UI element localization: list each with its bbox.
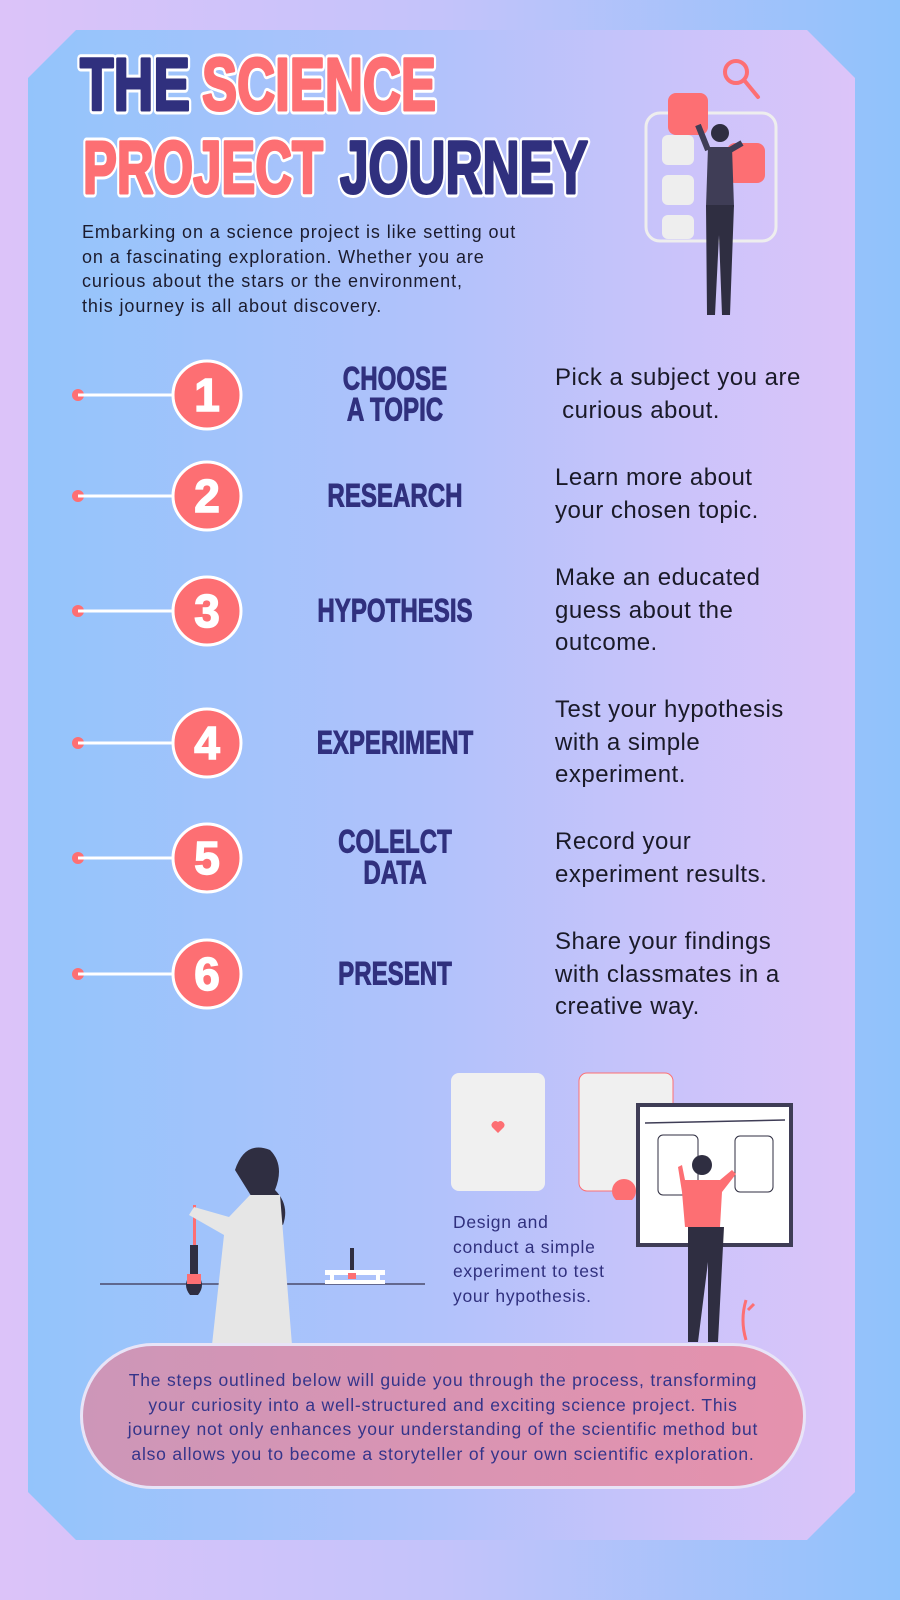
step 2: your chosen topic. bbox=[555, 496, 759, 524]
step 5 bbox=[72, 822, 767, 894]
caption: Design and bbox=[453, 1212, 549, 1232]
intro text: this journey is all about discovery. bbox=[82, 296, 382, 316]
callout: bottom summary: The steps outlined below will guide you through the process, transforming bbox=[129, 1370, 757, 1390]
step 2: RESEARCH bbox=[327, 478, 463, 513]
illustration: woman at whiteboard bbox=[636, 1103, 793, 1342]
step 4: 4 bbox=[194, 717, 220, 769]
step 6: PRESENT bbox=[338, 956, 452, 991]
step 3: outcome. bbox=[555, 629, 658, 656]
step 5: COLELCT bbox=[338, 824, 452, 859]
intro text bbox=[82, 222, 516, 316]
intro text: Embarking on a science project is like setting out bbox=[82, 222, 516, 242]
title: PROJECT bbox=[83, 126, 323, 209]
step 3 bbox=[72, 564, 760, 656]
step 1: curious about. bbox=[562, 396, 720, 424]
step 3: Make an educated bbox=[555, 564, 760, 591]
intro text: curious about the stars or the environment, bbox=[82, 271, 463, 291]
title: PROJECT bbox=[83, 126, 323, 209]
caption: experiment to test bbox=[453, 1261, 605, 1281]
step 6: Share your findings bbox=[555, 928, 771, 955]
step 5: DATA bbox=[363, 855, 427, 890]
intro text: on a fascinating exploration. Whether you are bbox=[82, 246, 485, 266]
step 5: Record your bbox=[555, 828, 691, 855]
step 6: creative way. bbox=[555, 993, 700, 1020]
illustration: scientist in lab bbox=[100, 1148, 425, 1343]
step 5: 5 bbox=[194, 832, 220, 884]
step 3: HYPOTHESIS bbox=[317, 593, 473, 628]
caption: your hypothesis. bbox=[453, 1286, 592, 1306]
step 6: with classmates in a bbox=[555, 960, 780, 988]
callout: bottom summary: journey not only enhances your understanding of the scientific method but bbox=[128, 1419, 758, 1439]
step 1 bbox=[72, 360, 801, 430]
callout: bottom summary: also allows you to become a storyteller of your own scientific exploration. bbox=[131, 1444, 755, 1464]
step 4 bbox=[72, 696, 784, 788]
step 2: Learn more about bbox=[555, 464, 752, 491]
step 2 bbox=[72, 460, 759, 532]
step 4: EXPERIMENT bbox=[317, 725, 473, 760]
step 4: experiment. bbox=[555, 761, 686, 788]
caption: conduct a simple bbox=[453, 1236, 596, 1256]
step 3: 3 bbox=[194, 585, 220, 637]
step 1: CHOOSE bbox=[343, 361, 447, 396]
cards bbox=[451, 1072, 674, 1200]
callout: bottom summary bbox=[80, 1343, 806, 1489]
illustration: woman at board bbox=[644, 59, 778, 315]
step 1: Pick a subject you are bbox=[555, 364, 801, 391]
caption bbox=[453, 1212, 605, 1306]
step 6: 6 bbox=[194, 948, 220, 1000]
step 4: with a simple bbox=[555, 728, 700, 756]
steps bbox=[72, 360, 801, 1020]
title bbox=[77, 50, 590, 209]
step 1: 1 bbox=[194, 369, 220, 421]
step 6 bbox=[72, 928, 780, 1020]
step 1: A TOPIC bbox=[347, 392, 443, 427]
callout: bottom summary: your curiosity into a well-structured and exciting science project. This bbox=[148, 1394, 738, 1414]
step 4: Test your hypothesis bbox=[555, 696, 784, 723]
step 3: guess about the bbox=[555, 596, 733, 624]
step 5: experiment results. bbox=[555, 860, 767, 888]
step 2: 2 bbox=[194, 470, 220, 522]
